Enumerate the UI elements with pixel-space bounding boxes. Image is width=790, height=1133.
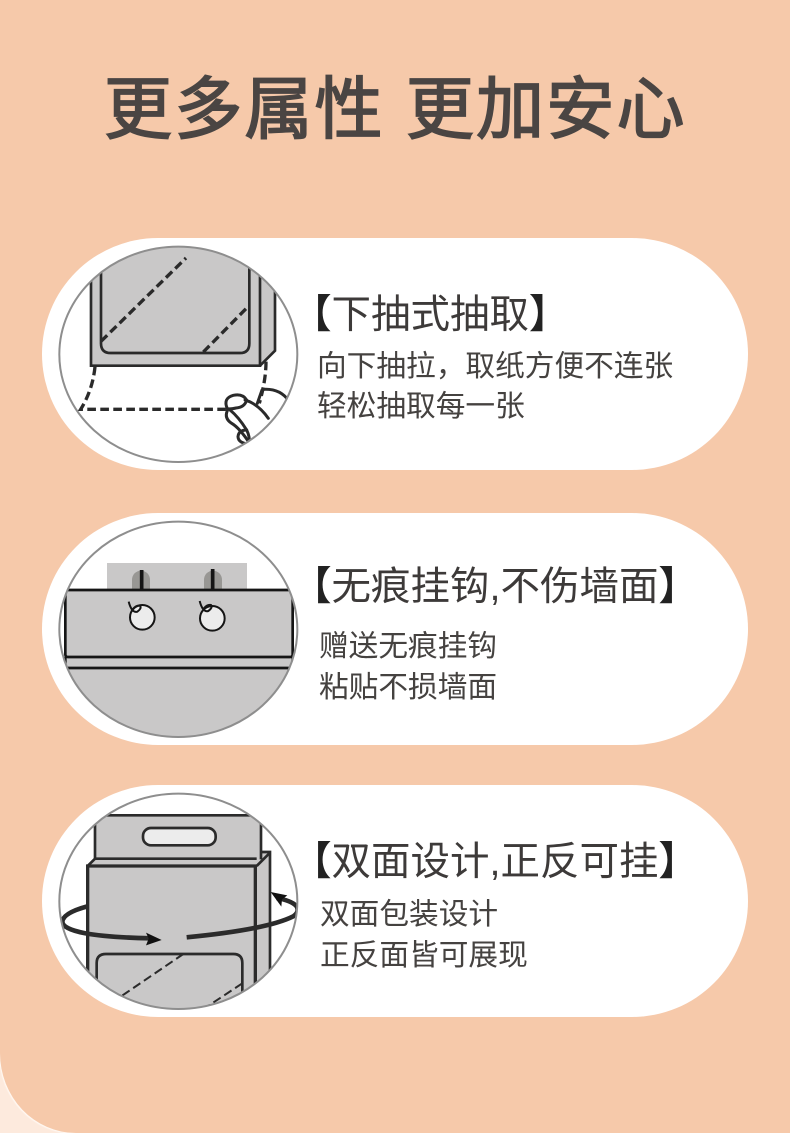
text: pull-down description line 2: 轻松抽取每一张 [317, 390, 525, 423]
heading: double-sided: 【双面设计,正反可挂】 [292, 840, 698, 884]
text: hook description line 2: 粘贴不损墙面 [319, 671, 497, 704]
title: 更多属性 更加安心 [104, 72, 687, 148]
heading: pull-down: 【下抽式抽取】 [292, 293, 568, 337]
icon: double-sided pack with rotation arrow [58, 792, 298, 1010]
panel: traceless hook [42, 513, 748, 745]
text: pull-down description line 1: 向下抽拉，取纸方便不连张 [317, 350, 673, 383]
icon: wall hooks and pack hanging holes [58, 520, 298, 738]
panel: double-sided design [42, 785, 748, 1017]
text: double-sided description line 2: 正反面皆可展现 [320, 939, 528, 972]
panel: pull-down dispensing [42, 238, 748, 470]
heading: traceless hook: 【无痕挂钩,不伤墙面】 [292, 565, 698, 609]
text: double-sided description line 1: 双面包装设计 [320, 898, 498, 931]
text: hook description line 1: 赠送无痕挂钩 [319, 630, 497, 663]
icon: hand pulling tissue from bottom of pack [58, 246, 298, 463]
